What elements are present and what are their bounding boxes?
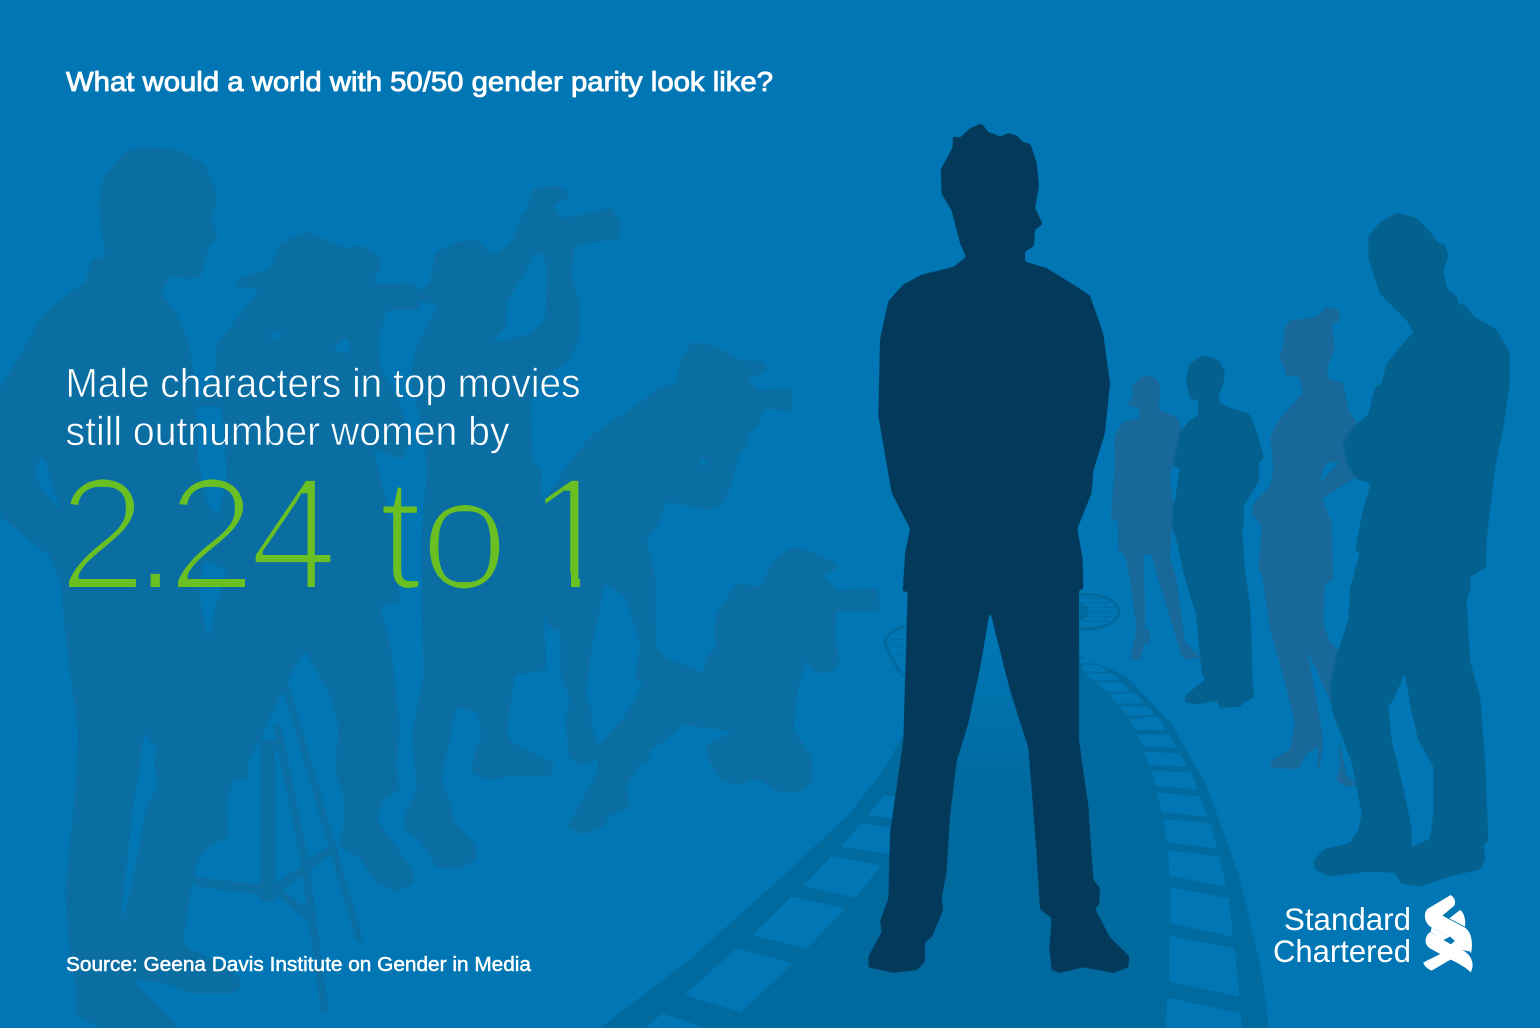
silhouette group: women and men at right (1111, 213, 1509, 887)
statistic intro text (66, 360, 580, 454)
film strip track (600, 600, 1269, 1028)
camera tripod (195, 683, 360, 1013)
key statistic: 2.24 to 1 (58, 444, 616, 623)
source note: Source: Geena Davis Institute on Gender in Media (66, 953, 532, 976)
statistic intro text: Male characters in top movies (66, 360, 580, 406)
silhouette: man and photographer torsos (0, 147, 422, 604)
title: What would a world with 50/50 gender parity look like? (66, 66, 773, 97)
silhouette: photographer with raised camera (403, 185, 622, 870)
silhouette: kneeling photographer (567, 547, 880, 835)
silhouette: woman in dress (1111, 375, 1200, 660)
silhouette: tall woman in heels (1252, 307, 1367, 787)
background silhouettes: film crew (0, 147, 880, 1028)
silhouette: man with folded arms (1313, 213, 1509, 887)
logo wordmark (1273, 901, 1411, 969)
logo wordmark: Chartered (1273, 933, 1411, 969)
film reels (885, 594, 1119, 677)
silhouette: central man (868, 123, 1129, 973)
icon: Standard Chartered logo (1423, 895, 1473, 972)
silhouette: leaning photographer (537, 342, 793, 766)
logo wordmark: Standard (1284, 901, 1411, 937)
silhouette: man in t-shirt (1173, 355, 1264, 708)
statistic intro text: still outnumber women by (66, 408, 510, 454)
silhouette: legs of foreground crew (62, 600, 413, 1028)
